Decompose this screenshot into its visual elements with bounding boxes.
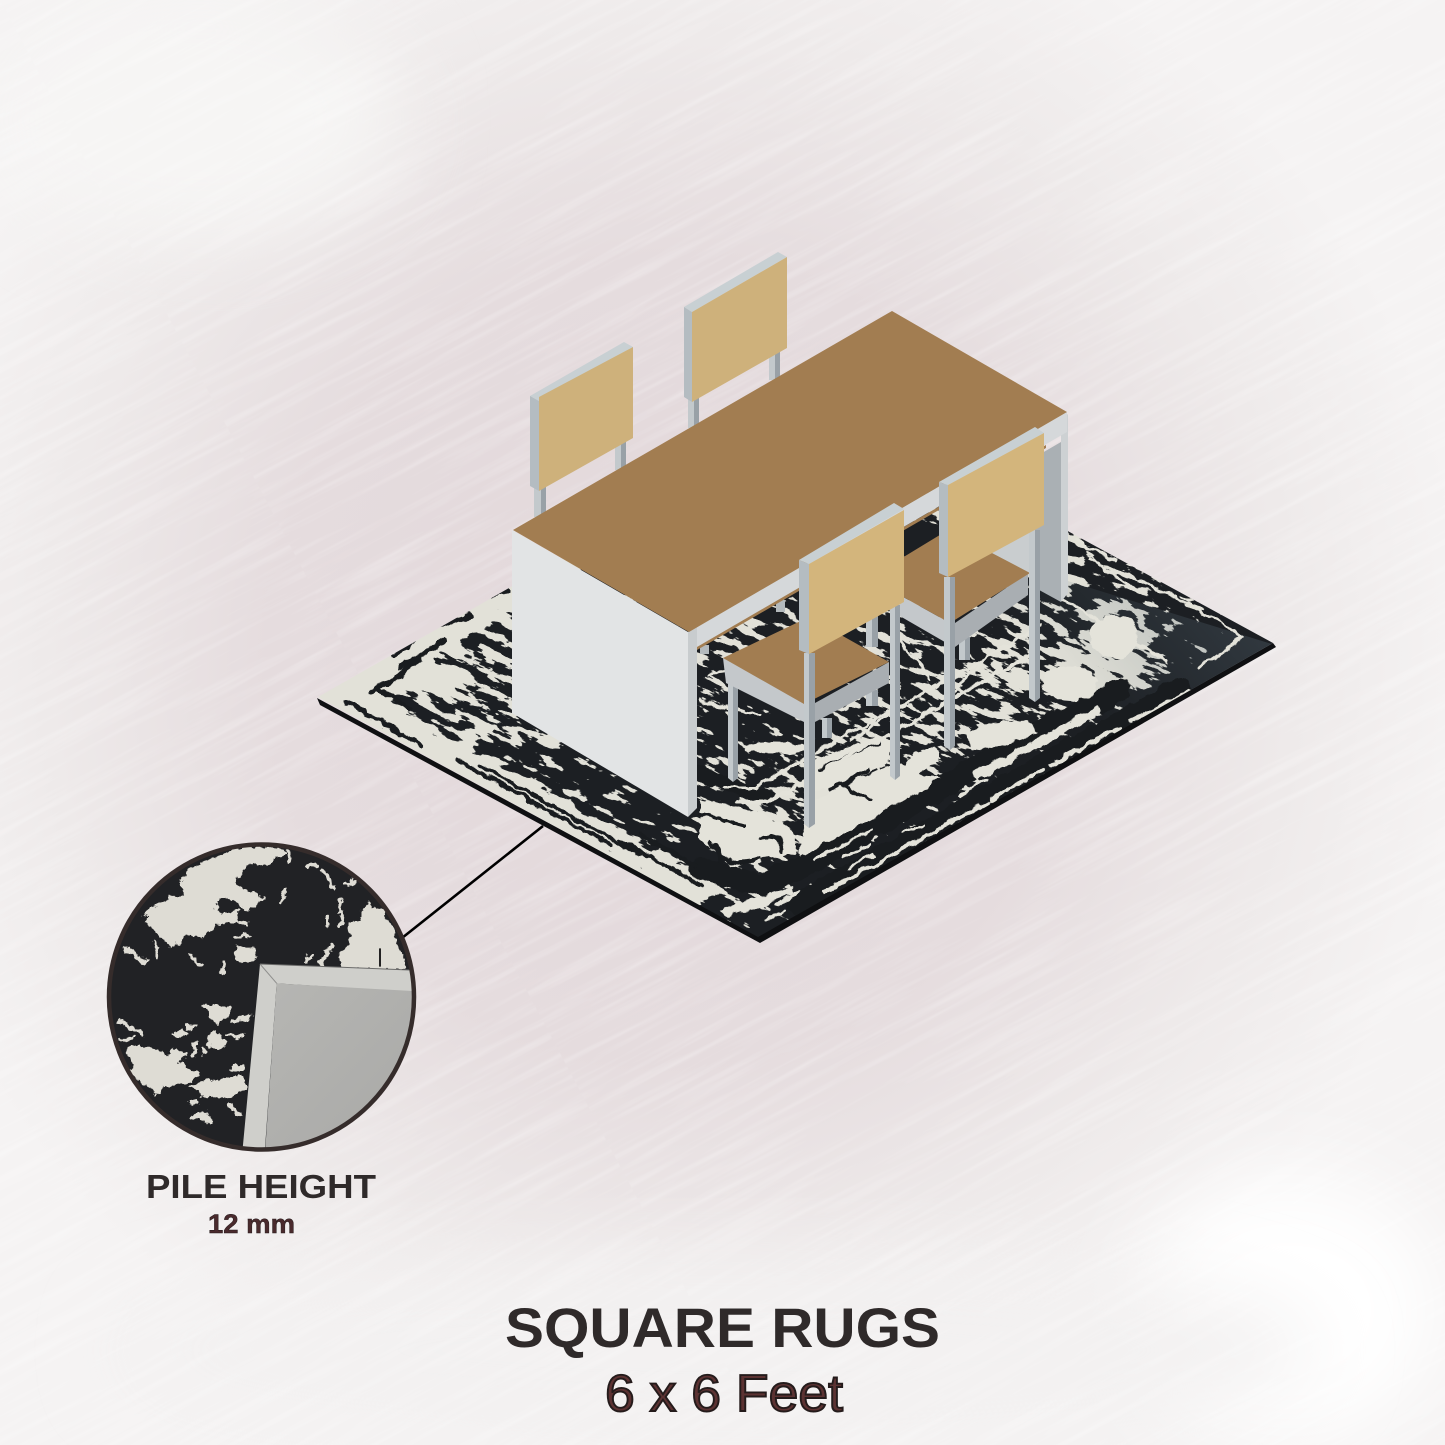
- table short side: [512, 530, 688, 817]
- rug pile cream blobs: [118, 848, 405, 1122]
- rug hand-placed motifs: [345, 540, 1244, 920]
- table right leg: [1030, 442, 1061, 602]
- chair: front left: [723, 503, 904, 828]
- rug sheen on right corner: [1028, 574, 1271, 698]
- dark marks on cream: [345, 590, 880, 885]
- rug back fold: [243, 964, 423, 1148]
- rug: isometric black and cream square rug: [317, 488, 1276, 943]
- dark bands under motifs: [690, 690, 1180, 905]
- table underside line: [697, 445, 1046, 650]
- rug back surface: [265, 984, 412, 1148]
- table: [512, 311, 1068, 817]
- table near leg edge: [688, 627, 697, 817]
- chair: back right: [684, 252, 787, 428]
- label: pile height: PILE HEIGHT: [146, 1169, 377, 1206]
- label: 12 mm: 12 mm: [208, 1209, 295, 1239]
- chair: back left: [530, 342, 633, 517]
- title: SQUARE RUGS: [505, 1296, 940, 1359]
- subtitle: 6 x 6 Feet: [605, 1365, 844, 1423]
- connector line from rug to detail circle: [402, 826, 543, 938]
- table long side apron: [688, 412, 1067, 647]
- table small far feet: [700, 645, 709, 654]
- chair: front right: [866, 427, 1044, 750]
- detail circle: pile height close-up: [109, 844, 423, 1153]
- rug edge thickness: [317, 643, 1276, 943]
- rug pile pattern: [319, 488, 1273, 937]
- table top: [513, 311, 1067, 632]
- cream motif areas: [700, 615, 1138, 918]
- cream lines on dark: [700, 540, 1244, 920]
